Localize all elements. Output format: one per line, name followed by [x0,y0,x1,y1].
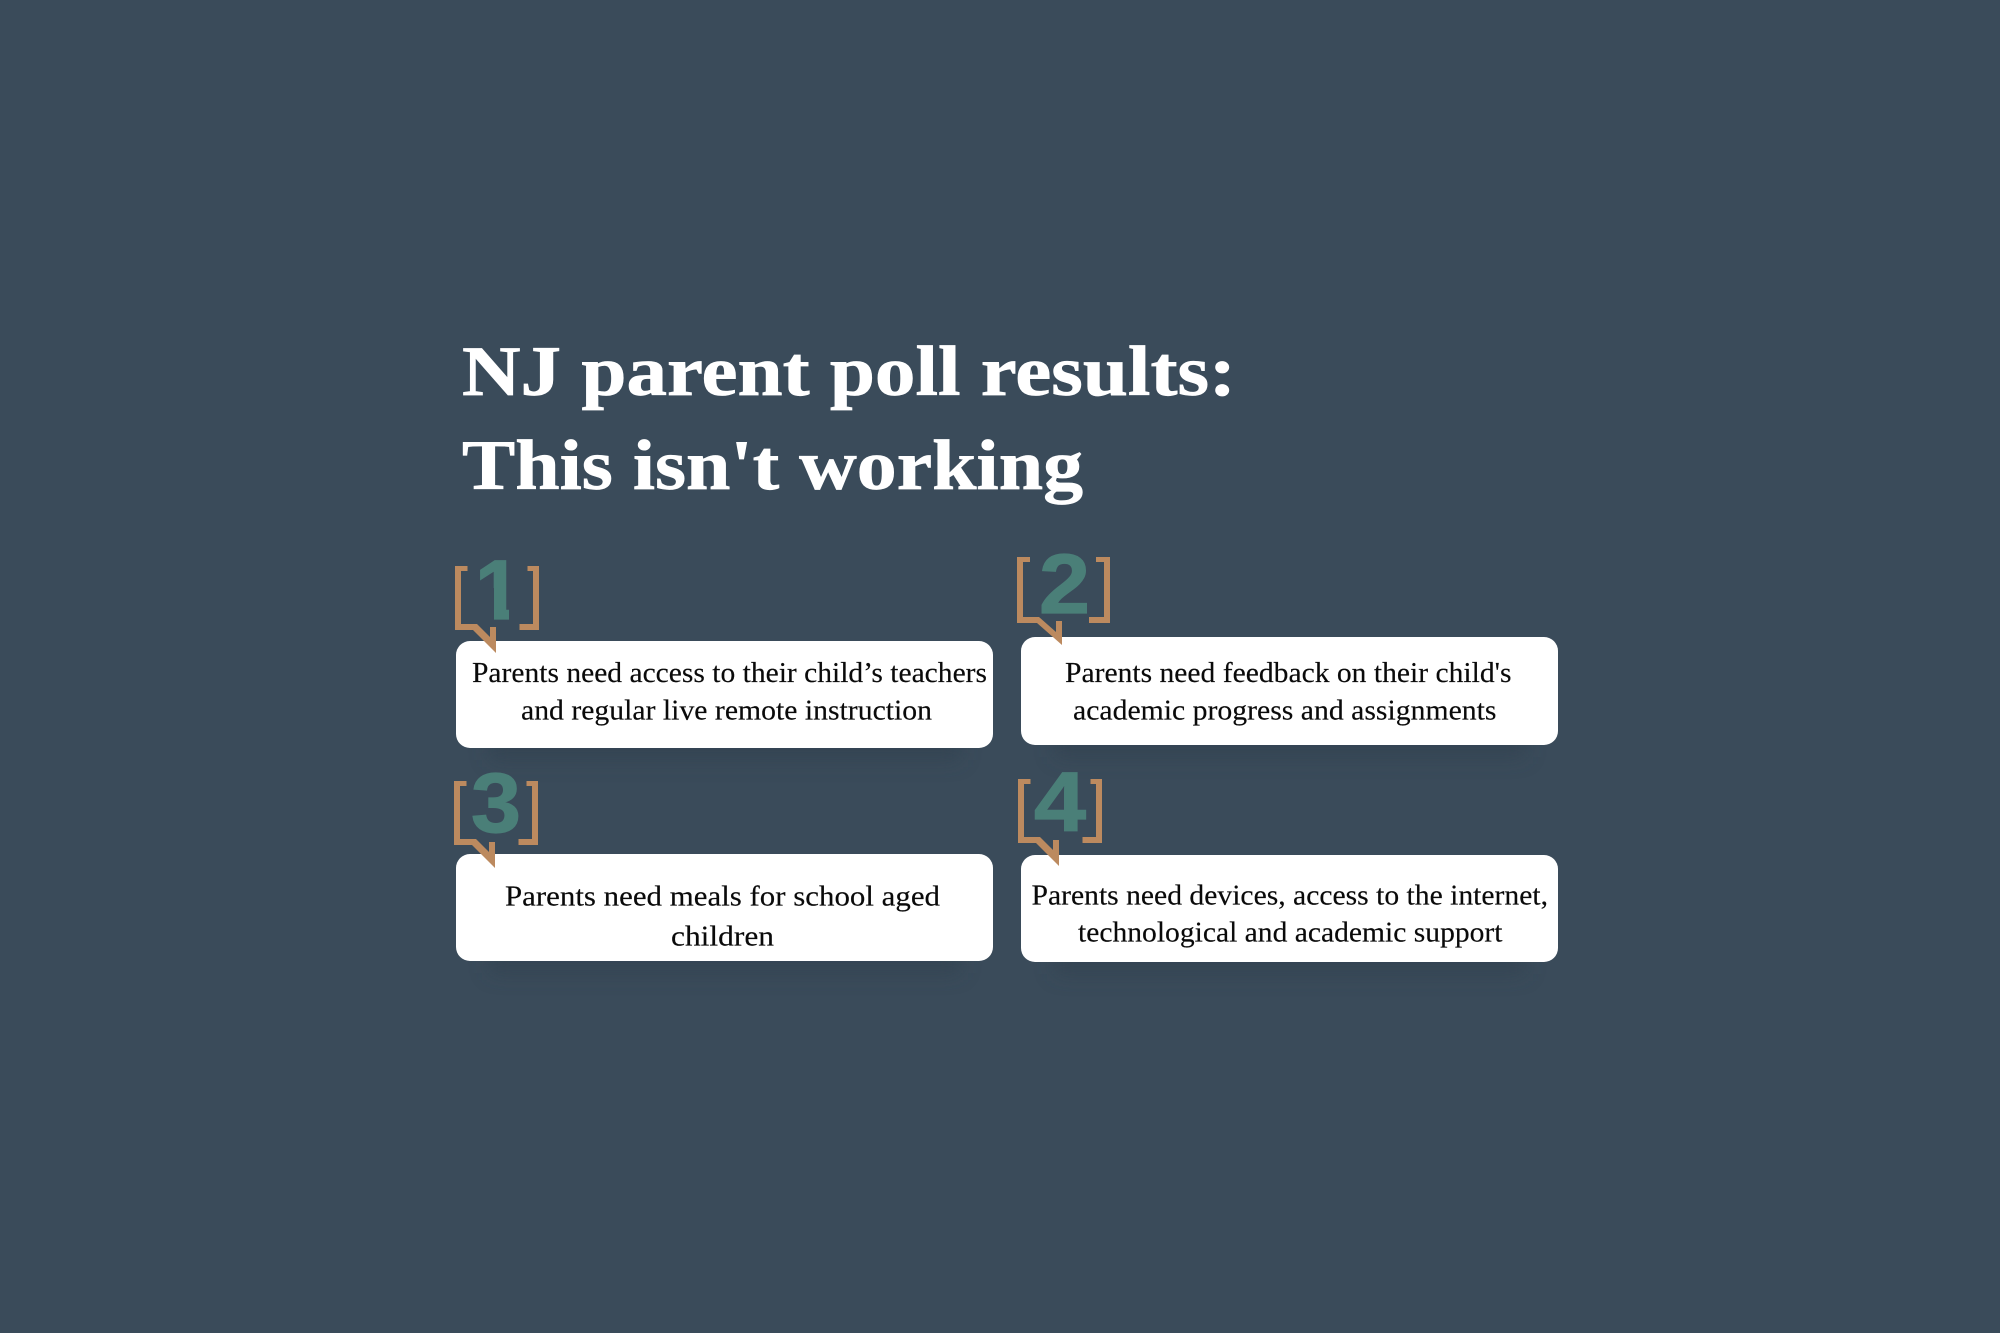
number 2: 2 [1039,537,1090,631]
text: item 2: Parents need feedback on their child's [1065,658,1512,689]
panel: item 2 [1017,537,1558,757]
number 1: 1 [475,543,521,637]
text: item 2: academic progress and assignments [1073,696,1496,726]
icon: bracket bubble 3 [454,781,538,868]
panel: item 4 [1018,755,1558,974]
number 4: 4 [1034,755,1086,849]
text: item 4: technological and academic support [1078,918,1503,948]
icon: bracket bubble 1 [455,566,539,653]
icon: bracket bubble 4 [1018,779,1102,866]
text: item 3: children [671,922,774,952]
title: NJ parent poll results: [462,333,1236,411]
number 3: 3 [471,756,521,850]
text: item 3: Parents need meals for school aged [505,882,940,912]
text: item 1 [472,658,987,726]
text: item 2 [1065,658,1512,726]
text: item 4: Parents need devices, access to the internet, [1032,880,1548,912]
text: item 1: and regular live remote instruction [521,696,932,726]
icon: bracket bubble 2 [1017,557,1110,645]
panel: item 3 [454,756,993,973]
title [462,333,1236,505]
text: item 1: Parents need access to their child’s teachers [472,658,987,689]
text: item 3 [505,882,940,952]
title: This isn't working [462,427,1083,505]
text: item 4 [1032,880,1548,948]
panel: item 1 [455,560,993,748]
